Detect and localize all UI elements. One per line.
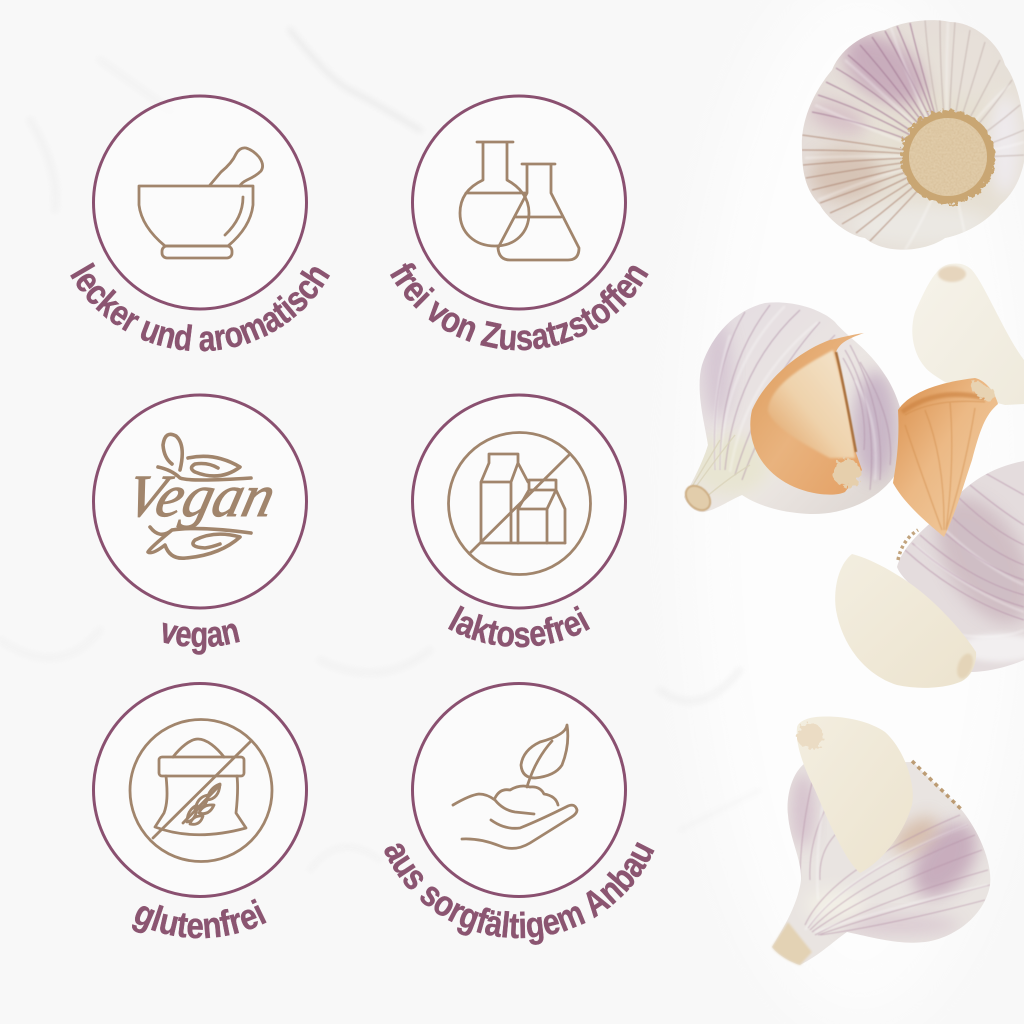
label: aus sorgfältigem Anbau [384,842,654,945]
bulb ribs [714,305,891,490]
icon: hand holding soil and seedling [453,725,577,848]
label: vegan [162,622,240,655]
illustration: partial garlic bulb right [897,461,1024,672]
badge: laktosefrei [411,394,627,648]
icon: vegan lettering with leaves [120,434,282,558]
badge ring [412,395,626,608]
badge ring [412,96,626,309]
clove edge line [836,352,856,452]
illustration: peeled clove top right [912,264,1024,405]
dry root edge [912,761,962,810]
badge ring [94,96,306,309]
illustration: peeled clove lower [835,554,976,688]
illustration: whole garlic bulb from below [802,20,1024,250]
badge ring [94,395,306,608]
bulb stem tip [681,481,715,515]
Vegan word: Vegan [120,464,282,530]
label: lecker und aromatisch [70,262,330,352]
dry root edge [898,530,918,560]
orange clove inner light face [768,350,855,458]
bulb ribs [812,22,936,138]
badge: glutenfrei [92,682,308,938]
badge: vegan [92,394,308,692]
illustration: orange clove [893,377,998,537]
bulb ribs [905,473,1024,620]
illustration: garlic bulb with orange clove [681,302,904,515]
badge ring [412,684,626,896]
illustration: garlic bulb with peeled clove bottom [772,717,990,965]
label: frei von Zusatzstoffen [390,263,649,350]
badge: lecker und aromatisch [70,94,330,352]
label: laktosefrei [448,605,590,648]
bulb ribs [800,770,990,935]
peeled clove on bulb [797,717,913,873]
badge: aus sorgfaeltigem Anbau [384,682,654,945]
badge: frei von Zusatzstoffen [390,94,649,350]
icon: crossed out flour sack with wheat [130,720,272,862]
icon: mortar and pestle [139,148,263,258]
bulb stem tip [772,922,812,965]
orange clove skin [750,333,864,495]
icon: laboratory flasks [460,142,579,260]
bulb root plate [901,110,995,204]
clove root [968,377,998,405]
label: glutenfrei [132,898,266,938]
badge ring [94,684,306,896]
bottom leaf flourish [148,527,251,558]
icon: crossed out milk cartons [448,432,590,574]
clove root [797,723,823,749]
clove root [833,459,861,487]
top leaf flourish [158,434,251,480]
